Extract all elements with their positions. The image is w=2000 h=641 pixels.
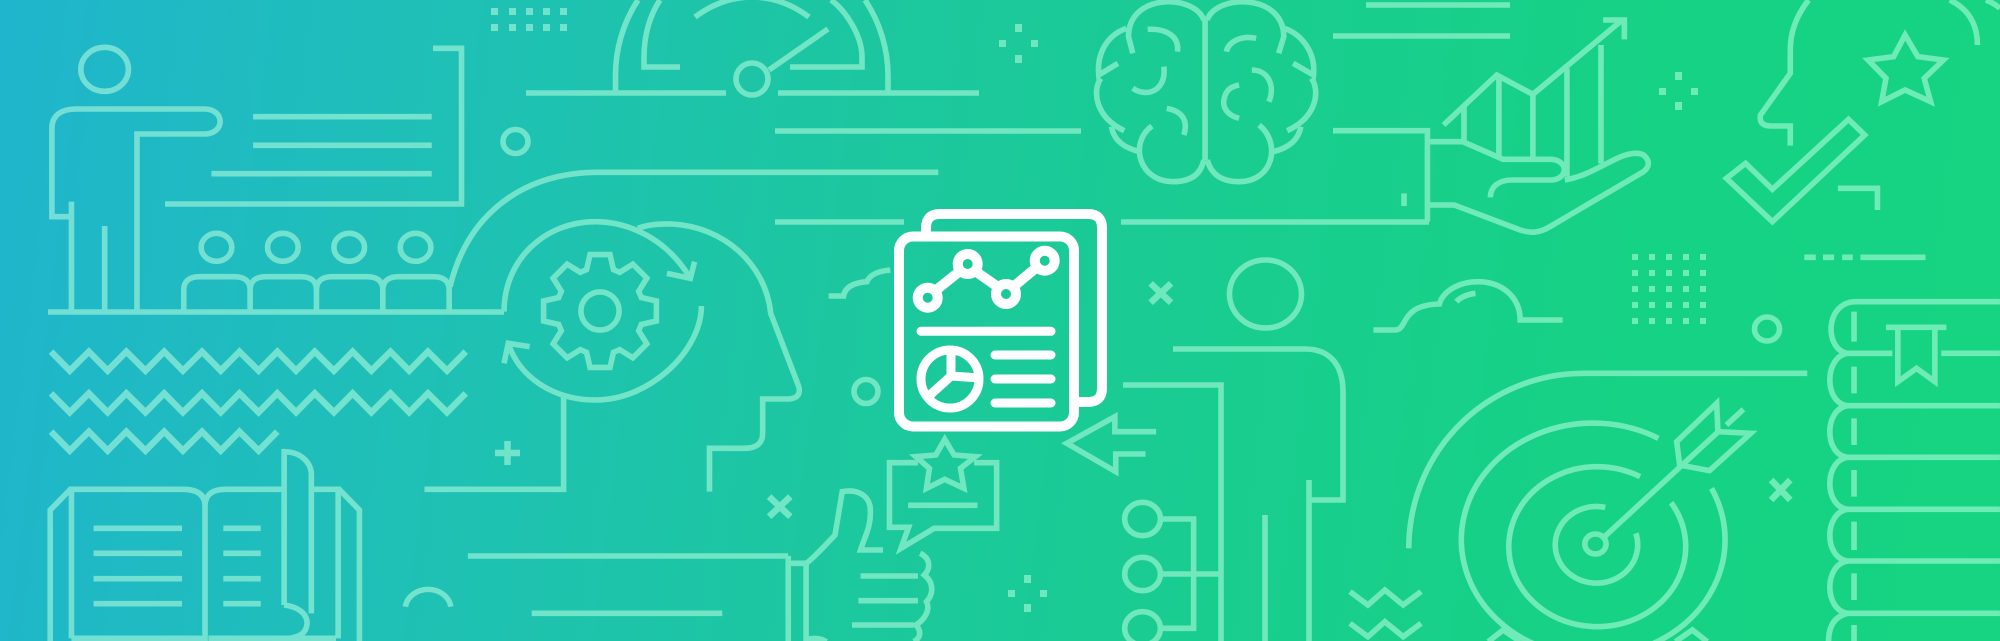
icon: audience seats (184, 233, 449, 312)
small arc and lines (405, 556, 788, 613)
small circle center (854, 380, 878, 404)
icon: head with gear and cycle arrows (424, 222, 799, 492)
zigzag lines left (51, 352, 466, 451)
pie chart (921, 346, 980, 408)
sparkle dots right (1659, 72, 1698, 110)
icon: sparkle dots (999, 24, 1038, 63)
partial cloud left (829, 270, 890, 296)
icon: presenter at board (52, 47, 462, 312)
icon: hand holding growth chart (1333, 20, 1648, 232)
back sheet (926, 214, 1102, 402)
top right lines (1121, 5, 1510, 222)
arrow pointing left (1067, 417, 1156, 472)
icon: stacked book with bookmark (1829, 302, 2000, 641)
small circle (503, 130, 528, 154)
icon: open book (50, 452, 359, 641)
dashed line right (1804, 255, 1926, 260)
front sheet (899, 236, 1074, 426)
icon: dot grid top (491, 8, 567, 31)
x mark left (769, 497, 790, 517)
speed lines (775, 131, 1081, 222)
line chart (918, 251, 1055, 308)
icon: head profile with star and check (1726, 0, 2000, 222)
icon: speech bubble with star (889, 439, 997, 548)
icon: cloud right (1373, 282, 1563, 330)
long curved connector line (450, 172, 938, 287)
icon: brain (1097, 2, 1316, 182)
icon: thumbs up (788, 491, 932, 641)
plus sign (495, 441, 520, 465)
floor line (48, 309, 504, 315)
icon: gear (544, 255, 656, 367)
icon: target with arrow (1409, 373, 1807, 641)
icon: speedometer (526, 0, 979, 95)
small circle right (1754, 317, 1780, 341)
icon: standing person (1123, 260, 1343, 641)
icon: node tree (1125, 502, 1220, 641)
divider line (921, 327, 1051, 336)
icon: central report with charts (899, 214, 1102, 426)
icon: dot grid right (1632, 254, 1706, 324)
x mark right (1771, 480, 1790, 500)
legend lines (995, 355, 1051, 403)
small zigzag lines (1350, 590, 1421, 637)
x mark center (1151, 283, 1171, 303)
sparkle dots lower (1008, 575, 1047, 612)
